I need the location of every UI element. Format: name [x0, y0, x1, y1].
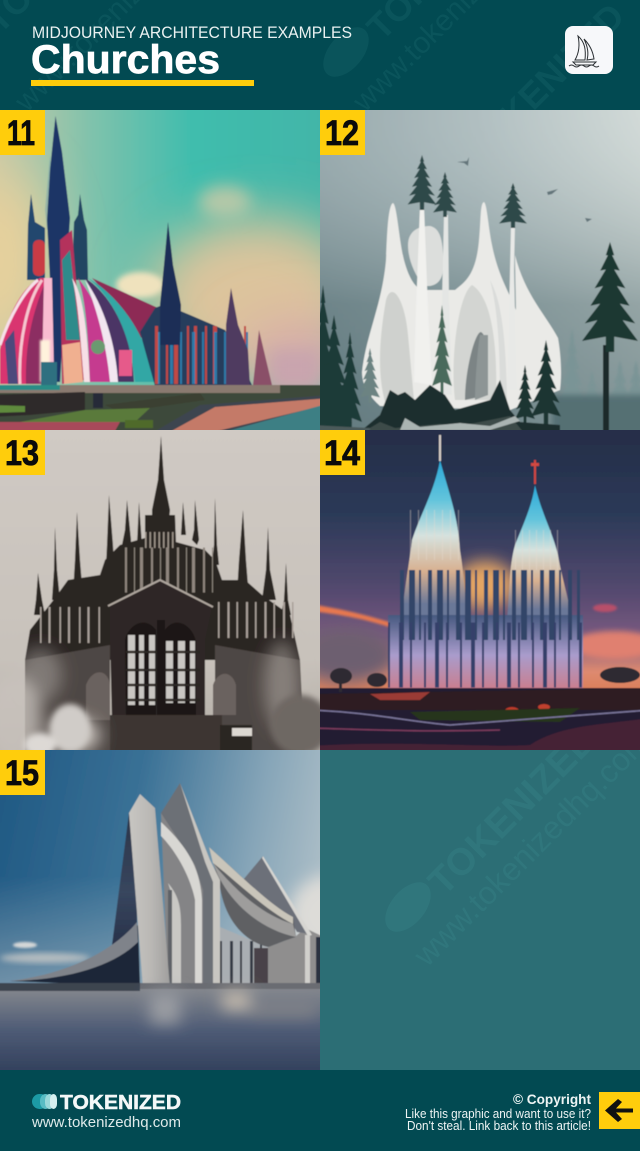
- cathedral silhouette: [25, 436, 300, 660]
- eyebrow heading: MIDJOURNEY ARCHITECTURE EXAMPLES: [32, 24, 352, 42]
- second spire: [160, 222, 181, 345]
- copyright note: Like this graphic and want to use it?: [405, 1107, 591, 1121]
- arrow box: [599, 1092, 640, 1129]
- side wings: [25, 645, 110, 760]
- figures at entrance: [41, 362, 57, 385]
- glass stripes: [400, 570, 580, 640]
- shrubs and ground: [364, 380, 560, 430]
- copyright note: © Copyright: [513, 1091, 591, 1107]
- copyright note: Don't steal. Link back to this article!: [407, 1119, 591, 1133]
- dusk sky: [320, 430, 640, 689]
- curved left wing: [10, 925, 140, 985]
- background misty firs: [570, 336, 640, 393]
- copyright note: [405, 1091, 591, 1133]
- fog: [0, 640, 300, 765]
- arches: [380, 292, 414, 405]
- nave dome teal: [88, 278, 155, 382]
- trees: [330, 667, 640, 692]
- body: [388, 615, 583, 688]
- floor: [0, 988, 330, 1080]
- nave roof: [92, 278, 157, 338]
- image 11: colourful cathedral: [0, 110, 320, 430]
- lower side arches: [86, 672, 110, 720]
- glowing spires: [400, 460, 468, 640]
- road lines: [310, 710, 640, 725]
- tokenized logo: TOKENIZED: [60, 1092, 181, 1114]
- front pillar: [129, 794, 170, 988]
- tiered central mass: [25, 515, 300, 660]
- upper facade detail: [125, 548, 215, 592]
- lawn and road: [0, 384, 320, 430]
- empty teal panel: [320, 750, 640, 1070]
- number badge 12: 12: [325, 114, 359, 153]
- header background watermark: TOKENIZED: [457, 0, 632, 171]
- number badge 15: 15: [5, 754, 39, 793]
- panel watermark: TOKENIZED: [421, 719, 605, 903]
- base: [109, 714, 222, 750]
- header: [31, 24, 613, 86]
- main gable: [110, 581, 206, 716]
- image 15: modern white church: [0, 740, 370, 1080]
- footer: [0, 1070, 640, 1151]
- main and side spires: [27, 116, 88, 382]
- dark ground: [310, 688, 640, 760]
- title: Churches: [31, 38, 220, 82]
- firs on poles: [408, 155, 527, 395]
- birds: [457, 157, 592, 222]
- curved roof: [209, 847, 296, 947]
- nave colourful wall: [140, 302, 252, 386]
- cart: [232, 728, 252, 736]
- header background watermark: [0, 0, 620, 110]
- stained windows: [125, 623, 156, 715]
- number badge 13: 13: [5, 434, 39, 473]
- image 13: gothic cathedral sketch: [0, 430, 320, 750]
- image 12: white organic church in forest: [320, 110, 640, 430]
- pale background: [0, 420, 330, 760]
- image 14: glowing glass cathedral at dusk: [320, 430, 640, 750]
- website: www.tokenizedhq.com: [31, 1114, 181, 1131]
- back dome: [408, 226, 443, 286]
- left dark forest: [320, 286, 362, 428]
- misty sky: [310, 100, 640, 440]
- inner arches: [161, 822, 202, 988]
- second curved fin: [161, 783, 220, 988]
- number badge 11: 11: [7, 114, 35, 153]
- floor reflections: [150, 992, 316, 1024]
- dome petals: [0, 278, 50, 384]
- spire crosses: [439, 435, 441, 461]
- blue sky: [0, 740, 330, 1080]
- glass wall: [220, 927, 268, 983]
- right wall and gable: [268, 928, 330, 983]
- white poles: [416, 209, 428, 291]
- sky: [0, 110, 320, 386]
- dark wing wall: [112, 813, 137, 945]
- icon: midjourney sail boat: [565, 26, 613, 74]
- third and fourth spires: [226, 288, 250, 386]
- large right fir: [582, 242, 638, 440]
- foreground firs: [515, 340, 561, 425]
- white building: [362, 202, 561, 410]
- ribbed body: [161, 813, 220, 988]
- title underline: [31, 80, 254, 86]
- number badge 14: 14: [324, 434, 360, 473]
